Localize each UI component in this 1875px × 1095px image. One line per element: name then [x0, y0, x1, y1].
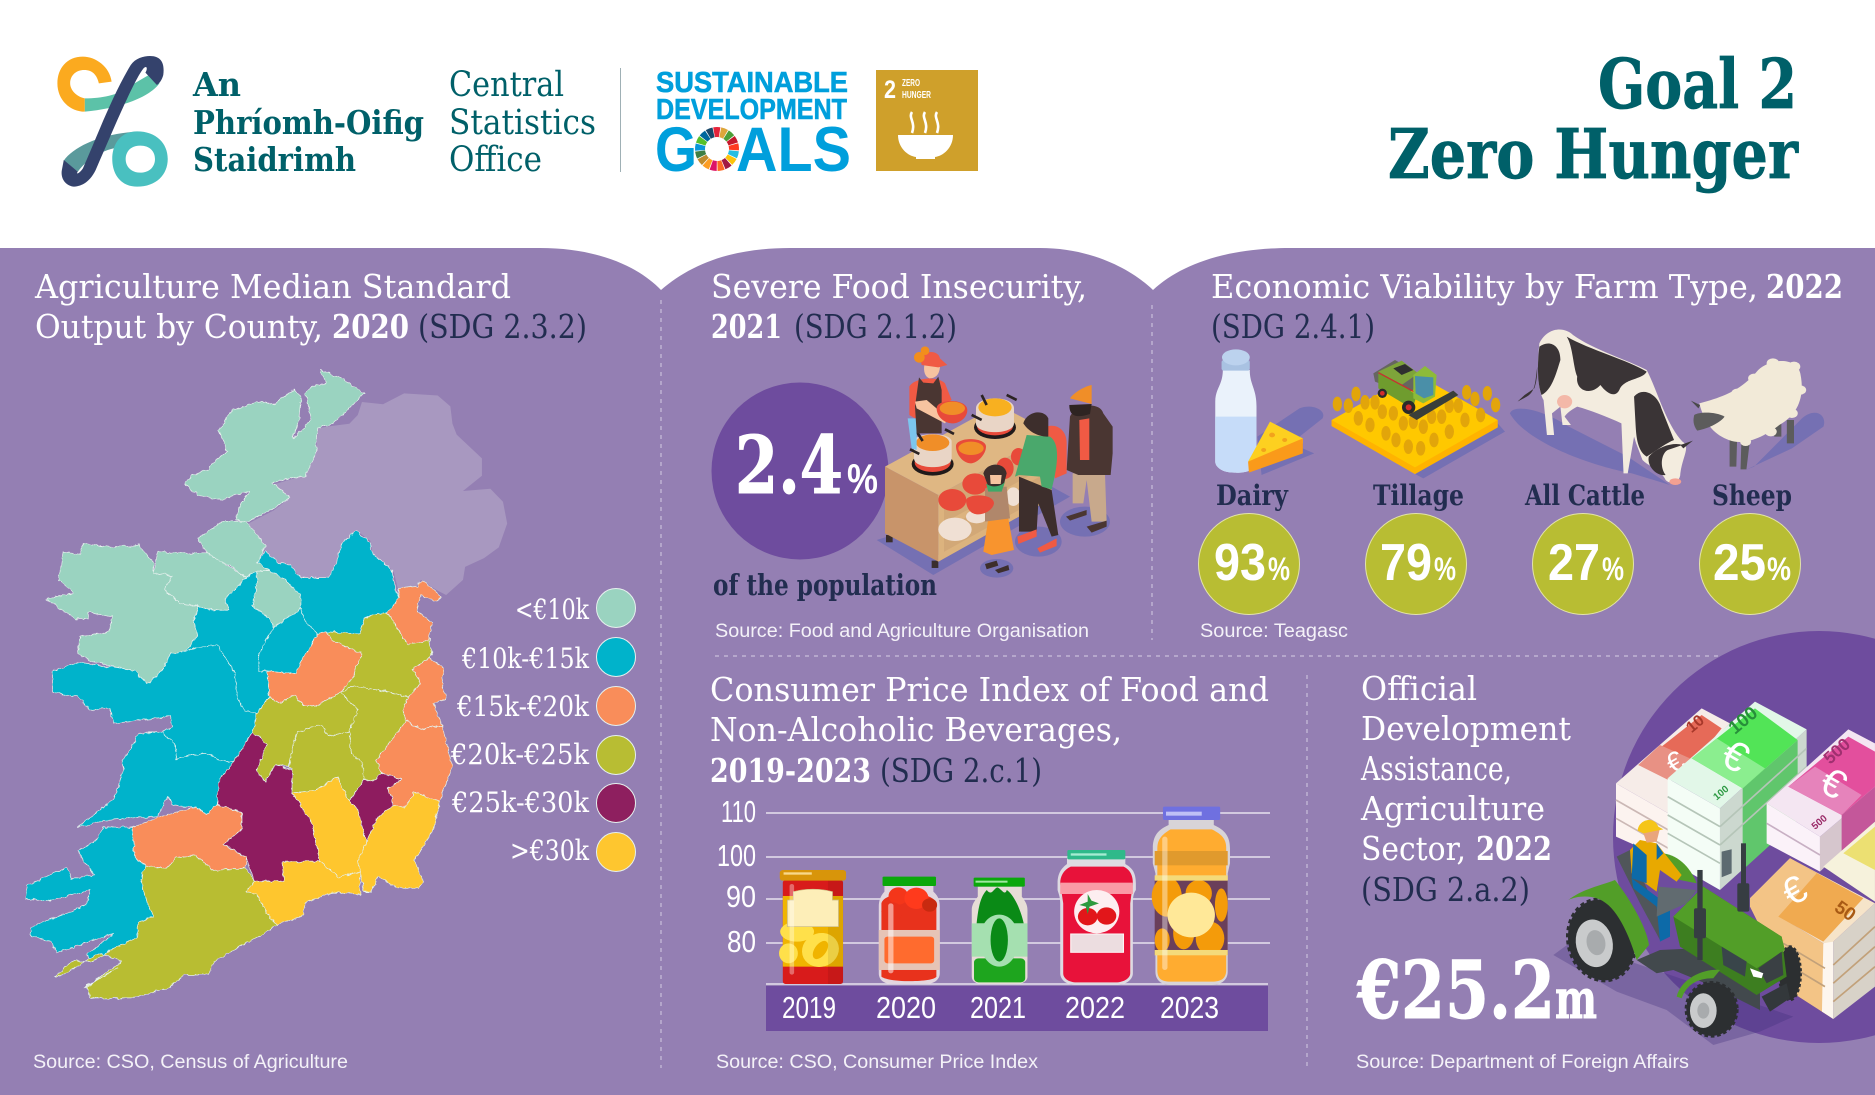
chart x axis band: 2023	[1160, 990, 1219, 1025]
person: backpacker in green top	[1015, 412, 1067, 553]
heading: ODA: Agriculture	[1360, 789, 1545, 828]
chart y axis labels: 100	[717, 838, 756, 873]
logo text: English name: Office	[449, 140, 542, 180]
heading: agriculture: 2020	[332, 307, 409, 346]
person: cook	[908, 346, 967, 450]
icon: milk and cheese	[1215, 349, 1323, 475]
stat: tillage: 79	[1380, 534, 1432, 592]
heading: ODA: Assistance,	[1360, 749, 1512, 788]
map legend	[450, 588, 636, 872]
source: map: Source: CSO, Census of Agriculture	[33, 1052, 348, 1073]
heading: CPI	[710, 670, 1269, 790]
heading: economic viability: (SDG 2.4.1)	[1211, 307, 1375, 346]
heading: food insecurity	[711, 267, 1087, 346]
€100 stack: €	[1714, 729, 1757, 782]
€50 stack: 50	[1831, 896, 1860, 925]
heading: CPI: (SDG 2.c.1)	[880, 751, 1042, 790]
€10 stack: €	[1661, 745, 1691, 780]
heading: ODA: Sector,	[1361, 829, 1466, 868]
chart x axis band: 2022	[1065, 990, 1125, 1025]
jar 2022	[1058, 850, 1136, 985]
stat circle: 2.4%	[712, 382, 888, 560]
chart y axis labels: 90	[726, 879, 756, 914]
logo text: Irish name: An	[192, 65, 241, 104]
€500 stack: 500	[1819, 734, 1854, 768]
icon: SDG colour wheel	[697, 129, 737, 169]
caption: of the population: of the population	[713, 568, 937, 602]
€50 stack: €	[1775, 867, 1815, 915]
farm illustrations	[1215, 330, 1824, 485]
heading: economic viability: 2022	[1766, 267, 1843, 306]
panel: official development assistance	[1356, 669, 1875, 1073]
ODA background circle	[1613, 631, 1875, 1043]
tractor with farmer	[1553, 820, 1801, 1045]
stat: tillage: Tillage	[1373, 479, 1464, 512]
heading: economic viability: Economic Viability by Farm Type,	[1211, 267, 1758, 306]
chart y axis labels: 80	[727, 924, 756, 959]
jar 2023	[1152, 807, 1230, 985]
map legend: €25k-€30k	[451, 786, 590, 819]
title: Zero Hunger	[1388, 115, 1799, 195]
yellow stack	[1823, 822, 1875, 902]
map legend: >€30k	[510, 834, 590, 867]
logo text: Irish name: Phríomh-Oifig	[193, 103, 424, 142]
heading: ODA: Development	[1361, 709, 1571, 748]
person: child	[966, 465, 1014, 573]
logo: Sustainable Development Goals: DEVELOPMENT	[656, 94, 847, 126]
icon: sheep	[1691, 358, 1824, 470]
stat: all cattle	[1524, 479, 1645, 614]
heading: CPI: 2019-2023	[710, 751, 871, 790]
logo text: English name: Statistics	[449, 103, 596, 143]
heading: agriculture	[34, 267, 587, 346]
chart x axis band: 2019	[782, 990, 836, 1025]
€10 stack	[1616, 708, 1730, 860]
pots and bowls	[910, 395, 1017, 476]
icon: wheat field and combine	[1332, 360, 1505, 478]
stat circle: 2.4%: 2.4	[735, 418, 843, 512]
source: CPI: Source: CSO, Consumer Price Index	[716, 1052, 1039, 1073]
stat: 25.2 million euro: m	[1555, 967, 1597, 1031]
logo: Sustainable Development Goals: ALS	[736, 115, 851, 185]
logo text: Irish name: Staidrimh	[193, 140, 356, 179]
map legend: €15k-€20k	[456, 690, 590, 723]
stat: all cattle: %	[1602, 551, 1624, 587]
logo text: English name: Central	[449, 65, 564, 105]
heading: ODA	[1360, 669, 1571, 909]
heading: food insecurity: 2021	[711, 307, 782, 346]
source: Teagasc: Source: Teagasc	[1200, 621, 1348, 642]
map of Ireland by county	[25, 370, 507, 998]
icon: CSO logo mark	[57, 56, 168, 187]
heading: ODA: 2022	[1476, 829, 1552, 868]
logo: Sustainable Development Goals: G	[655, 115, 697, 185]
icon: SDG 2 tile: ZERO	[902, 78, 920, 89]
heading: food insecurity: (SDG 2.1.2)	[794, 307, 957, 346]
food bank illustration	[877, 346, 1113, 578]
title	[1388, 45, 1799, 195]
stat: all cattle: All Cattle	[1524, 479, 1645, 512]
jar 2021	[972, 878, 1027, 984]
stat: sheep	[1700, 479, 1800, 614]
table	[885, 405, 1052, 568]
stat: all cattle: 27	[1548, 534, 1600, 592]
stat: dairy: %	[1268, 551, 1290, 587]
heading: CPI: Non-Alcoholic Beverages,	[710, 710, 1122, 749]
map legend: <€10k	[515, 593, 590, 626]
chart y axis labels: 110	[721, 794, 756, 829]
€50 stack	[1750, 858, 1875, 1019]
source: foreign affairs: Source: Department of Foreign Affairs	[1356, 1052, 1689, 1073]
stat: dairy	[1198, 479, 1300, 614]
logo text: English name	[449, 65, 596, 180]
stat: sheep: Sheep	[1712, 479, 1792, 512]
panel: severe food insecurity	[711, 267, 1113, 642]
jar 2020	[879, 877, 940, 984]
heading: CPI: Consumer Price Index of Food and	[710, 670, 1269, 709]
€500 stack	[1767, 729, 1875, 872]
panel background	[0, 248, 1875, 1095]
€500 stack: €	[1812, 759, 1854, 808]
header logos	[57, 56, 978, 187]
stat: dairy: 93	[1214, 534, 1266, 592]
€10 stack: 10	[1683, 712, 1708, 736]
source: FAO: Source: Food and Agriculture Organisation	[715, 621, 1089, 642]
stat: tillage: %	[1434, 551, 1456, 587]
stat: sheep: %	[1767, 551, 1791, 587]
stat: sheep: 25	[1713, 534, 1766, 592]
heading: food insecurity: Severe Food Insecurity,	[711, 267, 1087, 306]
stat circle: 2.4%: %	[847, 455, 878, 502]
chart x axis band	[766, 986, 1268, 1031]
heading: ODA: (SDG 2.a.2)	[1361, 870, 1530, 909]
heading: economic viability	[1211, 267, 1843, 346]
chart x axis band: 2021	[970, 990, 1026, 1025]
€500 stack: 500	[1810, 813, 1830, 832]
logo text: Irish name	[192, 65, 424, 179]
chart x axis band: 2020	[876, 990, 936, 1025]
person: backpacker in orange hat	[1066, 385, 1113, 533]
panel: agriculture map	[25, 267, 635, 1073]
stat: 25.2 million euro: €25.2	[1356, 943, 1555, 1037]
logo: Sustainable Development Goals: SUSTAINABLE	[656, 67, 848, 99]
€100 stack	[1668, 702, 1807, 890]
heading: ODA: Official	[1361, 669, 1477, 708]
banknotes illustration	[1553, 702, 1875, 1045]
€100 stack: 100	[1724, 702, 1761, 738]
title: Goal 2	[1598, 45, 1797, 125]
€100 stack: 100	[1712, 784, 1732, 803]
jar 2019	[779, 870, 846, 984]
heading: agriculture: Output by County,	[35, 307, 323, 346]
icon: SDG 2 tile	[876, 70, 978, 171]
stat: dairy: Dairy	[1216, 479, 1289, 512]
map legend: €10k-€15k	[461, 642, 590, 675]
logo: Sustainable Development Goals	[655, 67, 851, 185]
chart: jar pictogram	[717, 794, 1270, 1031]
icon: SDG 2 tile: HUNGER	[902, 90, 932, 101]
heading: agriculture: Agriculture Median Standard	[34, 267, 511, 306]
chart y axis labels	[717, 794, 756, 959]
heading: agriculture: (SDG 2.3.2)	[418, 307, 587, 346]
panel: economic viability	[1198, 267, 1843, 642]
map legend: €20k-€25k	[450, 738, 590, 771]
stat: tillage	[1366, 479, 1466, 614]
icon: cow	[1510, 330, 1693, 485]
icon: SDG 2 tile: 2	[884, 76, 896, 104]
panel: consumer price index	[710, 670, 1270, 1073]
